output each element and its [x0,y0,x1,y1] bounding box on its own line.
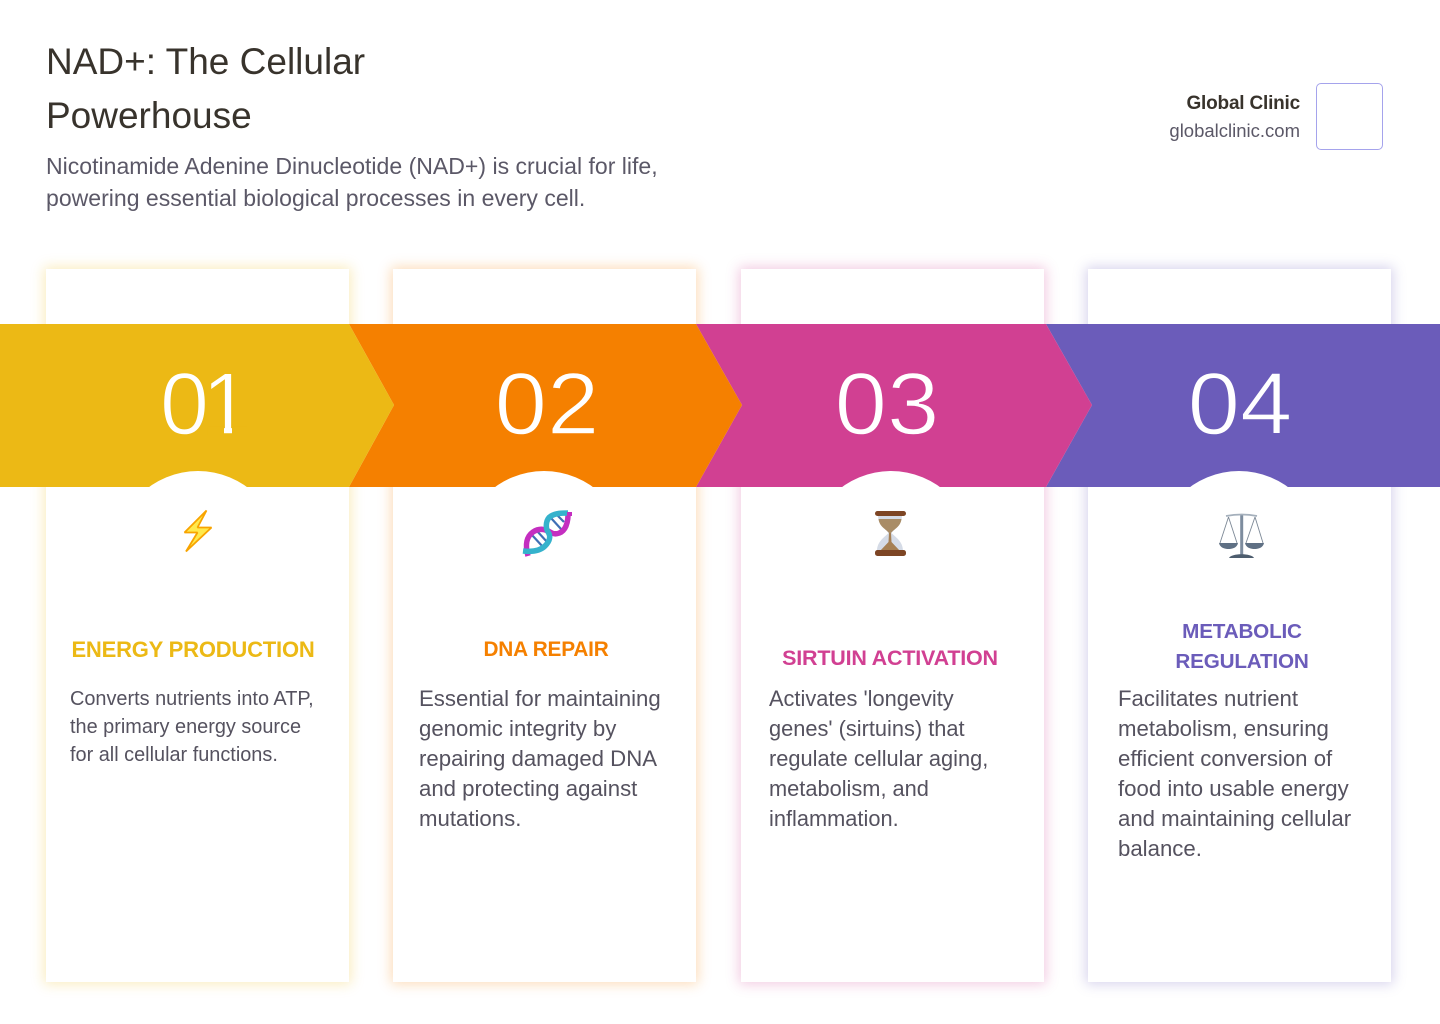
text: metabolic regulation: metabolism, ensuring [1118,716,1329,741]
icon: DNA helix [522,510,572,557]
text: sirtuin activation: Activates 'longevity [769,686,954,711]
title: Powerhouse [46,95,252,136]
brand name and website: Global Clinic [1186,93,1300,114]
heading: metabolic regulation: REGULATION [1175,650,1309,673]
text: sirtuin activation: inflammation. [769,806,899,831]
text: sirtuin activation: regulate cellular aging, [769,746,988,771]
title: NAD+: The Cellular [46,41,365,82]
text: sirtuin activation: metabolism, and [769,776,929,801]
icon: balance scale [1219,514,1264,558]
heading: metabolic regulation [1175,620,1309,673]
logo placeholder [1316,83,1383,150]
card 4 background [1088,269,1391,982]
heading: metabolic regulation: METABOLIC [1182,620,1302,643]
text: metabolic regulation [1118,686,1351,861]
text: DNA repair: and protecting against [419,776,637,801]
step number 03: 03 [835,354,939,453]
text: DNA repair [419,686,661,831]
text: metabolic regulation: Facilitates nutrient [1118,686,1298,711]
text: DNA repair: mutations. [419,806,521,831]
text: metabolic regulation: food into usable energy [1118,776,1349,801]
subtitle: Nicotinamide Adenine Dinucleotide (NAD+) is crucial for life, [46,153,658,179]
text: sirtuin activation [769,686,988,831]
subtitle: powering essential biological processes in every cell. [46,185,585,211]
brand name and website: globalclinic.com [1169,120,1300,141]
text: DNA repair: Essential for maintaining [419,686,661,711]
icon: lightning bolt [184,510,212,552]
text: DNA repair: repairing damaged DNA [419,746,657,771]
text: metabolic regulation: balance. [1118,836,1202,861]
text: metabolic regulation: efficient conversion of [1118,746,1332,771]
step number 04: 04 [1188,354,1292,453]
icon: hourglass [875,511,906,556]
card 2 background [393,269,696,982]
step number 02: 02 [495,354,599,453]
text: energy production: for all cellular functions. [70,744,278,766]
heading: DNA repair: DNA REPAIR [483,638,609,661]
text: DNA repair: genomic integrity by [419,716,616,741]
card 1 background [46,269,349,982]
text: energy production: the primary energy source [70,716,301,738]
card 3 background [741,269,1044,982]
text: metabolic regulation: and maintaining cellular [1118,806,1351,831]
heading: energy production: ENERGY PRODUCTION [71,637,315,662]
text: energy production [70,688,314,766]
step number 01: 01 [160,354,244,453]
heading: sirtuin activation: SIRTUIN ACTIVATION [782,646,998,670]
text: energy production: Converts nutrients into ATP, [70,688,314,710]
text: sirtuin activation: genes' (sirtuins) that [769,716,965,741]
brand name and website [1169,93,1300,141]
title [46,41,365,136]
subtitle [46,153,658,211]
